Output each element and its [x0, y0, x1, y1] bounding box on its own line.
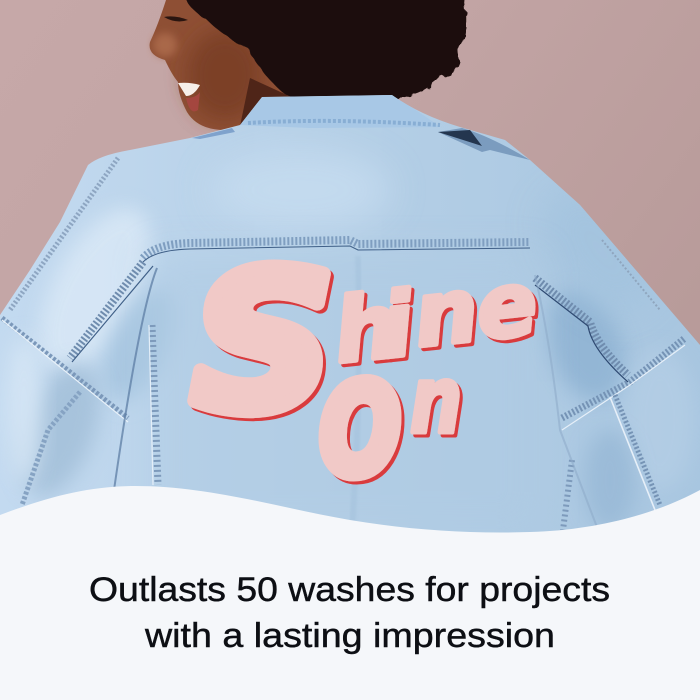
yoke seam — [143, 240, 530, 530]
caption heading: Outlasts 50 washes for projects — [89, 571, 610, 609]
jacket print: Shine On: n — [410, 347, 462, 454]
jacket print: Shine On: hine — [329, 251, 542, 383]
caption heading: with a lasting impression — [144, 617, 555, 655]
jacket print: Shine On — [192, 232, 542, 503]
mouth — [178, 83, 200, 96]
eye — [164, 16, 188, 21]
right sleeve seams — [535, 240, 685, 535]
collar — [192, 95, 530, 160]
background wall — [0, 0, 700, 560]
white wave caption panel — [0, 486, 700, 700]
person: afro hair — [183, 0, 466, 103]
person: face and neck — [150, 0, 298, 130]
jacket print: Shine On: S — [192, 232, 334, 453]
caption heading — [89, 571, 610, 655]
left sleeve seams — [2, 158, 158, 505]
denim jacket — [0, 95, 700, 532]
jacket print: Shine On: O — [320, 358, 400, 503]
jacket shading — [4, 150, 695, 535]
